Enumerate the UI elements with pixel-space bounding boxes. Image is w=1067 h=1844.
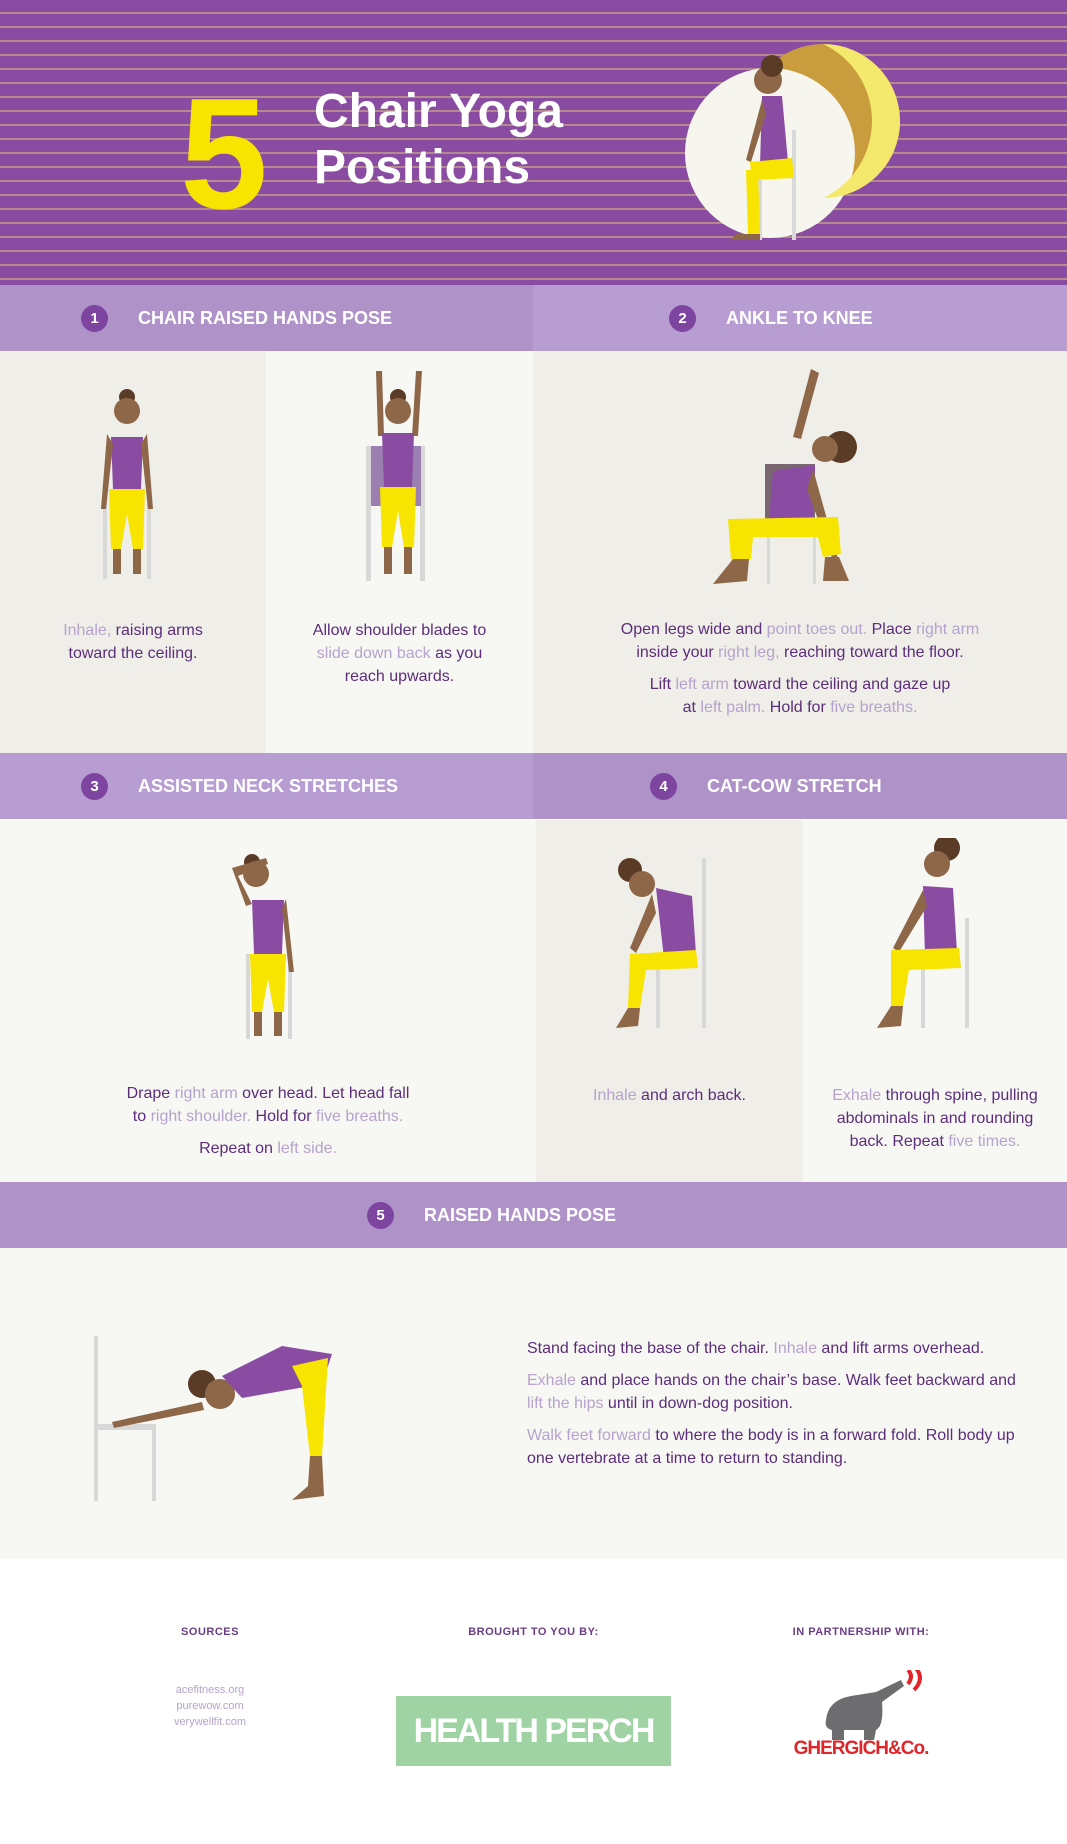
text 3: Repeat on left side. [199, 1140, 337, 1157]
sources list: acefitness.org [176, 1684, 244, 1696]
section bar 5: RAISED HANDS POSE [424, 1204, 616, 1224]
section bar 4: CAT-COW STRETCH [707, 776, 882, 796]
text 2: Lift left arm toward the ceiling and gaze up [650, 676, 950, 693]
text 5: Stand facing the base of the chair. Inhale and lift arms overhead. [527, 1340, 984, 1357]
header banner [0, 0, 1067, 285]
section bar 2: 2 [678, 310, 687, 326]
footer: sources [174, 1626, 246, 1728]
section bar 2 [533, 285, 1067, 351]
text 2 [621, 621, 979, 716]
text 2: inside your right leg, reaching toward the floor. [636, 644, 964, 661]
figure: cow pose [877, 838, 969, 1028]
figure: neck stretch [232, 854, 294, 1039]
hero illustration [685, 44, 900, 240]
text 1b: Allow shoulder blades to slide down back as you reach upwards. [313, 622, 486, 685]
section bar 3: ASSISTED NECK STRETCHES [138, 776, 398, 796]
section bar 1: CHAIR RAISED HANDS POSE [138, 308, 392, 328]
text 3: to right shoulder. Hold for five breaths. [133, 1108, 403, 1125]
footer: brought to you by [396, 1626, 671, 1766]
title text: Positions [314, 141, 530, 194]
section bar 2: ANKLE TO KNEE [726, 308, 873, 328]
footer: partnership: IN PARTNERSHIP WITH: [793, 1626, 929, 1638]
figure: forward fold with chair [94, 1336, 332, 1501]
panel 5 [0, 1248, 1067, 1559]
section bar 4: 4 [659, 778, 668, 794]
section bar 1: 1 [90, 310, 99, 326]
section bar 4 [533, 753, 1067, 819]
footer: sources: SOURCES [181, 1626, 239, 1638]
logo: health perch: HEALTH PERCH [414, 1712, 653, 1750]
section bar 1 [0, 285, 533, 351]
text 2: at left palm. Hold for five breaths. [683, 699, 917, 716]
text 5 [527, 1340, 1016, 1467]
text 1a: Inhale, raising arms toward the ceiling. [63, 622, 203, 662]
panel 4a [536, 820, 803, 1182]
text 3 [127, 1085, 409, 1157]
section bar 5: 5 [376, 1206, 385, 1224]
sources list: verywellfit.com [174, 1716, 246, 1728]
figure: cat pose [616, 858, 706, 1028]
panel 2 [533, 351, 1067, 753]
text 4a: Inhale and arch back. [593, 1087, 746, 1104]
panel 3 [0, 820, 536, 1182]
panel 1b [266, 351, 533, 753]
title number 5: 5 [180, 66, 268, 242]
sources list [174, 1684, 246, 1728]
section bar 3 [0, 753, 533, 819]
text 3: Drape right arm over head. Let head fall [127, 1085, 409, 1102]
section bar 3: 3 [90, 778, 99, 794]
sources list: purewow.com [176, 1700, 244, 1712]
text 5: Walk feet forward to where the body is in a forward fold. Roll body up one vertebrate at a time to return to standing. [527, 1427, 1015, 1467]
figure: seated arms up [366, 371, 425, 581]
section bar 5 [0, 1182, 1067, 1248]
text 5: Exhale and place hands on the chair’s base. Walk feet backward and lift the hips until in down-dog position. [527, 1372, 1016, 1412]
logo: health perch [396, 1696, 671, 1766]
text 4b: Exhale through spine, pulling abdominals in and rounding back. Repeat five times. [832, 1087, 1038, 1150]
logo text: GHERGICH&Co. [794, 1738, 928, 1759]
footer: partnership [793, 1626, 929, 1759]
footer: brought to you by: BROUGHT TO YOU BY: [468, 1626, 599, 1638]
title text [314, 85, 564, 194]
panel 1a [0, 351, 266, 753]
panel 4b [803, 820, 1067, 1182]
figure: ankle to knee side stretch [713, 369, 857, 584]
title text: Chair Yoga [314, 85, 563, 138]
text 2: Open legs wide and point toes out. Place right arm [621, 621, 979, 638]
figure: seated arms down [101, 389, 153, 579]
logo: ghergich elephant [826, 1670, 922, 1740]
